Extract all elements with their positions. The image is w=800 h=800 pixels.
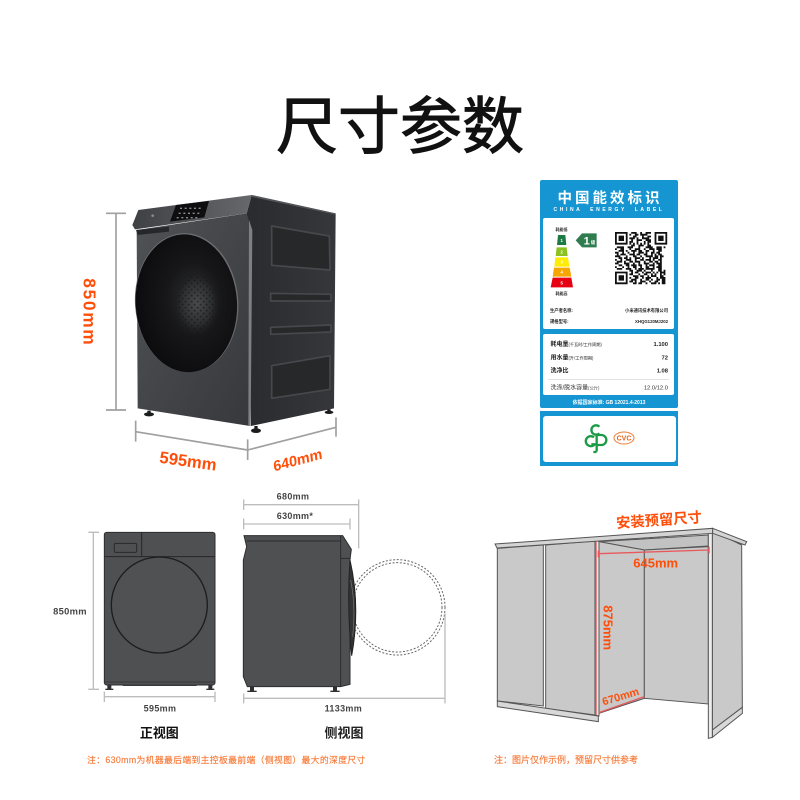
dimension lines [106,213,336,460]
door swing dashed circles [350,560,445,655]
energy grade pyramid: 1 [560,238,563,243]
cabinet heading: 安装预留尺寸 [615,508,702,532]
cabinet interior [599,535,708,713]
label blue background [540,180,678,408]
washer front panel [136,213,252,426]
model row: XHQG120MJ202 [635,319,669,324]
1133mm label: 1133mm [325,704,362,714]
645mm label: 645mm [633,555,678,570]
670mm label: 670mm [601,686,641,708]
energy grade pyramid: 1 [584,236,590,248]
front view feet [105,685,214,690]
washing machine 3D view with dimensions [79,195,336,476]
wash ratio row [550,366,669,374]
capacity row: 洗涤/脱水容量(公斤) [550,384,600,392]
side view diagram [243,491,445,740]
wash ratio row: 洗净比 [550,366,569,374]
manufacturer row: 小米通讯技术有限公司 [625,307,668,314]
energy grade pyramid: 4 [560,270,563,275]
label: 850mm height: 850mm [79,278,99,346]
electricity row [550,340,668,348]
upper white panel [543,218,674,329]
side view feet [247,687,340,692]
side view caption: 侧视图 [325,725,363,740]
label subheading: CHINA ENERGY LABEL [554,207,664,213]
high consumption caption: 耗能高 [556,290,568,296]
width label: 595mm [144,704,176,714]
energy grade pyramid: 级 [591,239,596,246]
red measure lines [596,542,709,715]
icon: CGP green mark [586,425,606,452]
label: 595mm width: 595mm [158,448,218,475]
front view diagram [53,532,215,740]
washer top control panel [132,195,336,229]
certification panel [540,411,678,466]
front view caption: 正视图 [140,725,179,740]
model row: 规格型号: [550,318,569,325]
standard footer: 依据国家标准: GB 12021.4-2013 [573,399,646,406]
installation cabinet diagram [495,508,747,738]
cabinet right end panel [708,531,742,738]
washer door [130,230,243,376]
electricity row: 耗电量(千瓦时/工作周期) [550,340,602,348]
wash ratio row: 1.08 [657,368,669,374]
energy grade pyramid [551,233,597,287]
model row [550,318,669,325]
manufacturer row: 生产者名称: [550,307,573,314]
cabinet top cornice [495,528,747,548]
water row [550,354,668,362]
front view body [104,532,215,686]
lower white panel [543,334,674,395]
height label: 850mm [53,607,87,617]
energy grade pyramid: 3 [560,260,563,265]
630mm label: 630mm* [277,511,313,521]
washer feet [144,409,333,433]
label: 640mm depth: 640mm [272,446,323,476]
QR code [615,232,667,284]
washer side panel [247,195,336,426]
title: 尺寸参数 [276,93,524,162]
electricity row: 1.100 [653,342,668,348]
cabinet left doors [497,541,599,722]
energy grade pyramid: 5 [560,280,563,285]
manufacturer row [550,307,668,314]
875mm label: 875mm [600,605,615,650]
water row: 72 [662,356,668,362]
capacity row: 12.0/12.0 [644,386,668,392]
footnote right: 注：图片仅作示例，预留尺寸供参考 [494,754,638,765]
energy label [540,180,678,408]
water row: 用水量(升/工作周期) [550,354,594,362]
680mm label: 680mm [277,491,309,501]
side view body [243,536,356,687]
capacity row [550,384,668,392]
label heading: 中国能效标识 [558,189,662,207]
energy grade pyramid: 2 [560,249,563,254]
low consumption caption: 耗能低 [556,226,568,232]
footnote left: 注：630mm为机器最后端到主控板最前端（侧视图）最大的深度尺寸 [87,754,366,765]
icon: CVC orange badge: CVC [617,436,631,442]
